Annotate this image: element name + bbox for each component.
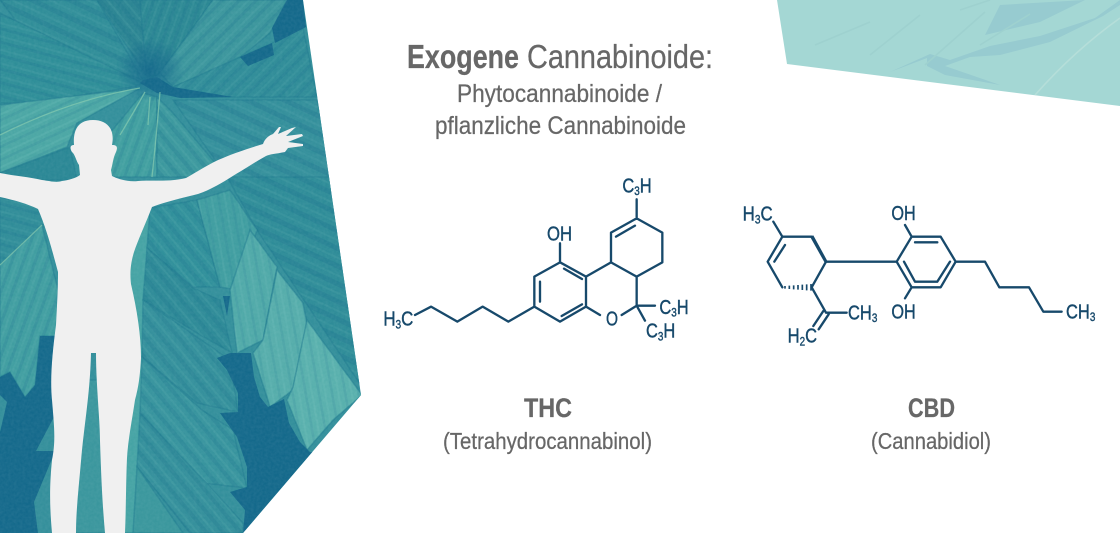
- lower right leaves: [120, 177, 362, 533]
- molecule: THC: H: [677, 297, 689, 319]
- molecule: CBD: [743, 203, 1096, 348]
- label: THC: [443, 393, 652, 454]
- label: THC: (Tetrahydrocannabinol): [443, 428, 652, 454]
- molecule: CBD: 3: [755, 212, 761, 226]
- molecule: THC: H: [640, 175, 652, 197]
- molecule: THC: 3: [671, 306, 677, 320]
- label: CBD: CBD: [908, 393, 955, 423]
- label: THC: THC: [524, 393, 572, 423]
- left leaves: [0, 198, 96, 396]
- molecule: THC: C: [659, 297, 674, 319]
- molecule: CBD: CH: [1066, 301, 1095, 323]
- molecule: CBD: 3: [872, 311, 878, 325]
- molecule: THC: C: [401, 309, 413, 331]
- human silhouette: [0, 120, 303, 533]
- molecule: THC: [383, 175, 689, 343]
- molecule: THC: 3: [634, 184, 640, 198]
- molecule: CBD: H: [788, 326, 802, 348]
- title: Cannabinoide:: [527, 38, 713, 75]
- molecule: CBD: C: [805, 326, 817, 348]
- molecule: CBD: OH: [891, 301, 916, 323]
- small lower-left leaflets: [0, 395, 54, 533]
- upper leaves: [0, 0, 340, 190]
- molecule: THC: 3: [658, 329, 664, 343]
- molecule: CBD: CH: [848, 302, 877, 324]
- molecule: THC: OH: [547, 224, 572, 246]
- molecule: CBD: H: [743, 204, 757, 226]
- molecule: THC: C: [622, 175, 637, 197]
- panel: faded leaf top right: [777, 0, 1120, 106]
- title: pflanzliche Cannabinoide: [435, 112, 686, 140]
- molecule: CBD: OH: [891, 203, 916, 225]
- molecule: THC: C: [646, 321, 660, 343]
- leaf stems: [0, 88, 160, 265]
- molecule: THC: O: [606, 309, 618, 331]
- molecule: THC: H: [663, 321, 675, 343]
- molecule: THC: H: [383, 309, 398, 331]
- title: [407, 38, 713, 140]
- molecule: CBD: 2: [800, 334, 805, 348]
- title: Phytocannabinoide /: [457, 80, 662, 108]
- dark gaps between leaves: [0, 0, 330, 533]
- panel: cannabis leaf photo: [0, 0, 362, 533]
- molecule: THC: 3: [396, 317, 401, 331]
- molecule: CBD: 3: [1090, 310, 1096, 324]
- molecule: CBD: C: [760, 204, 773, 226]
- title: Exogene: [407, 38, 519, 75]
- label: CBD: (Cannabidiol): [871, 428, 991, 454]
- label: CBD: [871, 393, 991, 454]
